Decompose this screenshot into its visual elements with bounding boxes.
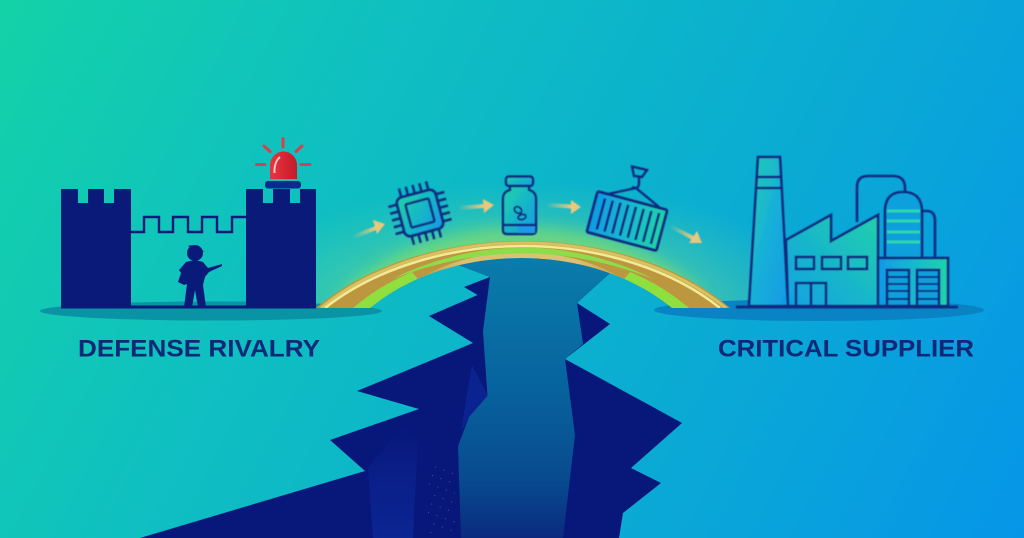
base line xyxy=(736,306,958,308)
main building xyxy=(786,215,878,306)
inner tan strip xyxy=(424,254,618,276)
chimney xyxy=(749,157,788,306)
arrow 4 xyxy=(670,226,702,243)
right tower xyxy=(246,189,316,308)
icon: microchip xyxy=(384,177,456,249)
arrow 2 xyxy=(458,199,494,213)
ground shadow: right xyxy=(654,299,984,321)
icon: shipping container xyxy=(587,166,667,251)
alarm siren xyxy=(256,138,310,188)
arrow 1 xyxy=(353,220,385,237)
factory: critical supplier xyxy=(736,157,958,307)
annex block xyxy=(878,258,948,306)
chasm water xyxy=(456,255,610,538)
label: critical supplier: CRITICAL SUPPLIER xyxy=(718,336,974,362)
siren base xyxy=(265,181,301,188)
label: defense rivalry: DEFENSE RIVALRY xyxy=(78,336,320,362)
arrow 3 xyxy=(546,200,581,214)
crane hook xyxy=(608,166,659,207)
crenellated wall xyxy=(131,217,246,232)
upper green xyxy=(392,248,654,279)
dust specks xyxy=(428,465,455,535)
siren rays xyxy=(256,138,310,164)
siren dome xyxy=(270,152,297,179)
storage tank xyxy=(885,192,922,258)
lower green xyxy=(353,272,422,308)
shutters xyxy=(887,270,939,306)
left tower xyxy=(61,189,131,308)
door xyxy=(796,283,826,306)
back tanks xyxy=(857,176,905,222)
bridge glow xyxy=(316,196,751,307)
golden arc bridge xyxy=(316,241,730,308)
soldier xyxy=(178,245,222,307)
chasm crack xyxy=(140,255,682,538)
lighter rock facets xyxy=(368,425,418,538)
ground shadow: left xyxy=(40,302,382,320)
container body xyxy=(587,191,667,251)
castle: defense rivalry xyxy=(61,189,316,308)
ground line xyxy=(61,306,316,308)
icon: medicine bottle xyxy=(503,176,536,234)
windows xyxy=(796,257,814,269)
